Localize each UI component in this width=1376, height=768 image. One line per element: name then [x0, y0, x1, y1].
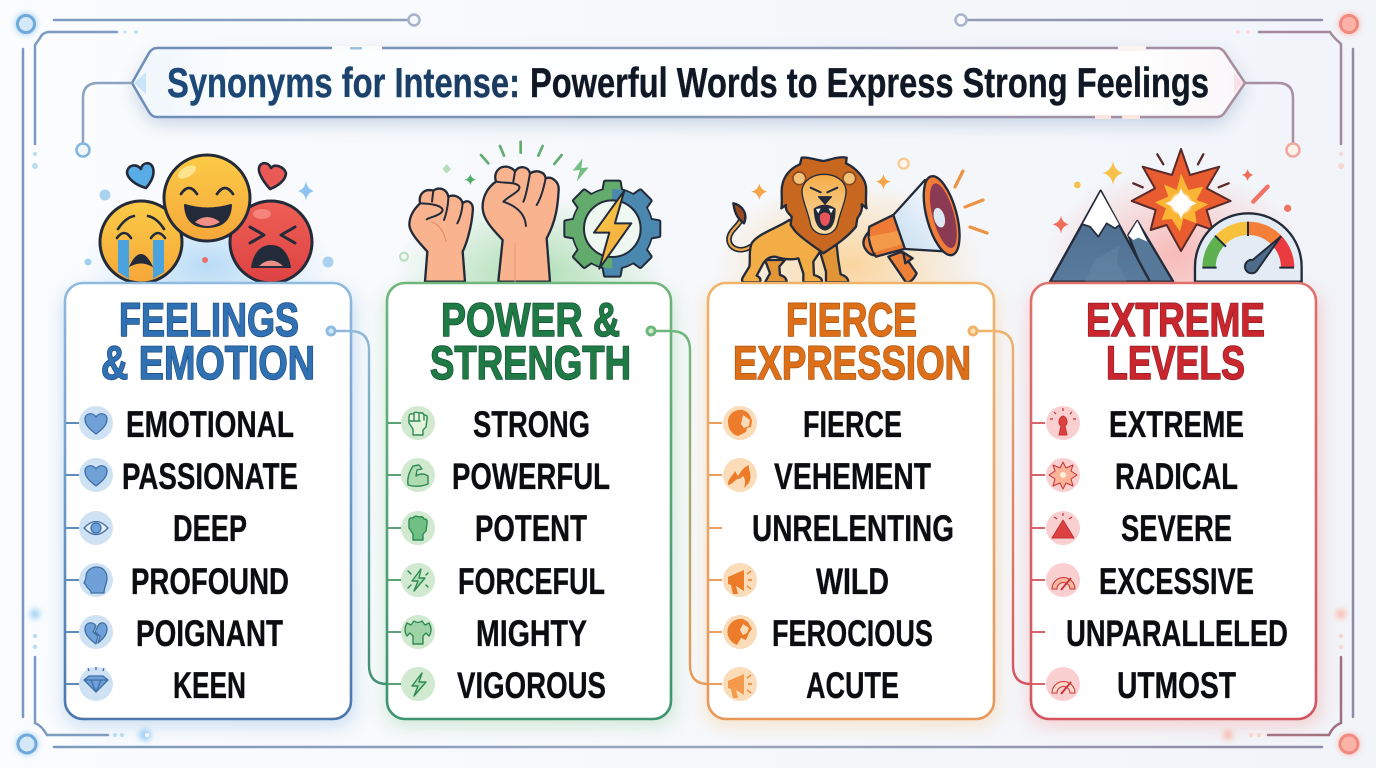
illustration: mountains, explosion and gauge	[1050, 149, 1302, 282]
row ticks: power	[388, 423, 401, 684]
synonyms list: extreme: RADICAL	[1115, 456, 1238, 497]
row icons: power	[401, 406, 435, 701]
panel: fierce expression	[708, 283, 1031, 719]
icon: sound waves	[955, 171, 987, 233]
heading: extreme levels: EXTREME	[1086, 293, 1265, 346]
icon: right fist	[483, 167, 559, 282]
icon: lion	[729, 157, 867, 282]
icon: red heart	[259, 163, 286, 189]
synonyms list: fierce: VEHEMENT	[774, 456, 931, 497]
synonyms list: fierce	[752, 404, 954, 706]
icon: angry face	[230, 201, 312, 283]
heading: fierce expression: EXPRESSION	[733, 336, 971, 389]
icon: speedometer	[1195, 213, 1302, 282]
heading: extreme levels	[1086, 293, 1265, 389]
synonyms list: feelings: KEEN	[173, 665, 246, 706]
icon: left fist	[409, 189, 473, 282]
row icons: extreme	[1046, 406, 1080, 701]
icon: energy rays	[481, 142, 562, 164]
heading: power and strength: STRENGTH	[430, 336, 631, 389]
heading: power and strength: POWER &	[441, 293, 620, 346]
synonyms list: fierce: ACUTE	[806, 665, 899, 706]
synonyms list: fierce: WILD	[816, 561, 889, 602]
synonyms list: extreme: UNPARALLELED	[1066, 613, 1288, 654]
panel: extreme levels	[1031, 283, 1316, 719]
title text: Synonyms for Intense:	[167, 59, 520, 106]
synonyms list: power: MIGHTY	[476, 613, 587, 654]
synonyms list: extreme: SEVERE	[1121, 508, 1232, 549]
synonyms list: power: FORCEFUL	[458, 561, 605, 602]
synonyms list: power: STRONG	[473, 404, 590, 445]
synonyms list: feelings: DEEP	[173, 508, 247, 549]
heading: power and strength	[430, 293, 631, 389]
connector to next panel	[647, 327, 708, 684]
heading: extreme levels: LEVELS	[1106, 336, 1245, 389]
icon: blue heart	[127, 163, 154, 188]
synonyms list: fierce: UNRELENTING	[752, 508, 954, 549]
icon: red and gold accents	[1053, 161, 1291, 233]
synonyms list: power: VIGOROUS	[457, 665, 606, 706]
icon: explosion	[1132, 149, 1231, 251]
row icons: feelings	[79, 406, 113, 701]
row icons: fierce	[723, 406, 757, 701]
synonyms list: power	[452, 404, 610, 706]
title banner	[132, 46, 1245, 124]
panel: power and strength	[387, 283, 708, 719]
row ticks: fierce	[709, 423, 722, 684]
heading: feelings and emotion	[101, 293, 315, 389]
icon: orange sparkles	[751, 159, 909, 200]
heading: feelings and emotion: FEELINGS	[119, 293, 299, 346]
illustration: emotion faces	[84, 155, 334, 283]
synonyms list: extreme: EXCESSIVE	[1099, 561, 1254, 602]
synonyms list: extreme	[1066, 404, 1288, 706]
icon: laughing face	[164, 155, 250, 241]
panel shadows	[63, 290, 1321, 726]
synonyms list: power: POTENT	[475, 508, 587, 549]
synonyms list: feelings: PROFOUND	[131, 561, 289, 602]
banner connectors	[76, 83, 1300, 156]
synonyms list: power: POWERFUL	[452, 456, 610, 497]
illustration: raised fists and gear	[400, 142, 660, 282]
title text	[167, 59, 1209, 106]
icon: megaphone	[863, 173, 967, 282]
synonyms list: feelings: POIGNANT	[136, 613, 283, 654]
panel: feelings and emotion	[65, 283, 387, 719]
heading: fierce expression: FIERCE	[786, 293, 917, 346]
illustration glows	[83, 170, 1305, 355]
row ticks: extreme	[1032, 423, 1045, 684]
synonyms list: fierce: FIERCE	[803, 404, 902, 445]
heading: feelings and emotion: & EMOTION	[101, 336, 315, 389]
icon: green accents	[400, 158, 589, 261]
illustration: roaring lion and megaphone	[729, 157, 967, 282]
synonyms list: fierce: FEROCIOUS	[772, 613, 933, 654]
row ticks: feelings	[66, 423, 79, 684]
synonyms list: feelings	[122, 404, 298, 706]
icon: snowy mountains	[1050, 191, 1173, 282]
synonyms list: extreme: UTMOST	[1117, 665, 1236, 706]
heading: fierce expression	[733, 293, 971, 389]
synonyms list: feelings: PASSIONATE	[122, 456, 298, 497]
icon: sparkles and dots	[84, 181, 334, 268]
synonyms list: feelings: EMOTIONAL	[126, 404, 294, 445]
icon: crying face	[100, 201, 182, 283]
synonyms list: extreme: EXTREME	[1109, 404, 1244, 445]
connector to next panel	[327, 327, 387, 684]
connector to next panel	[969, 327, 1031, 684]
icon: gear with lightning bolt	[564, 181, 660, 277]
